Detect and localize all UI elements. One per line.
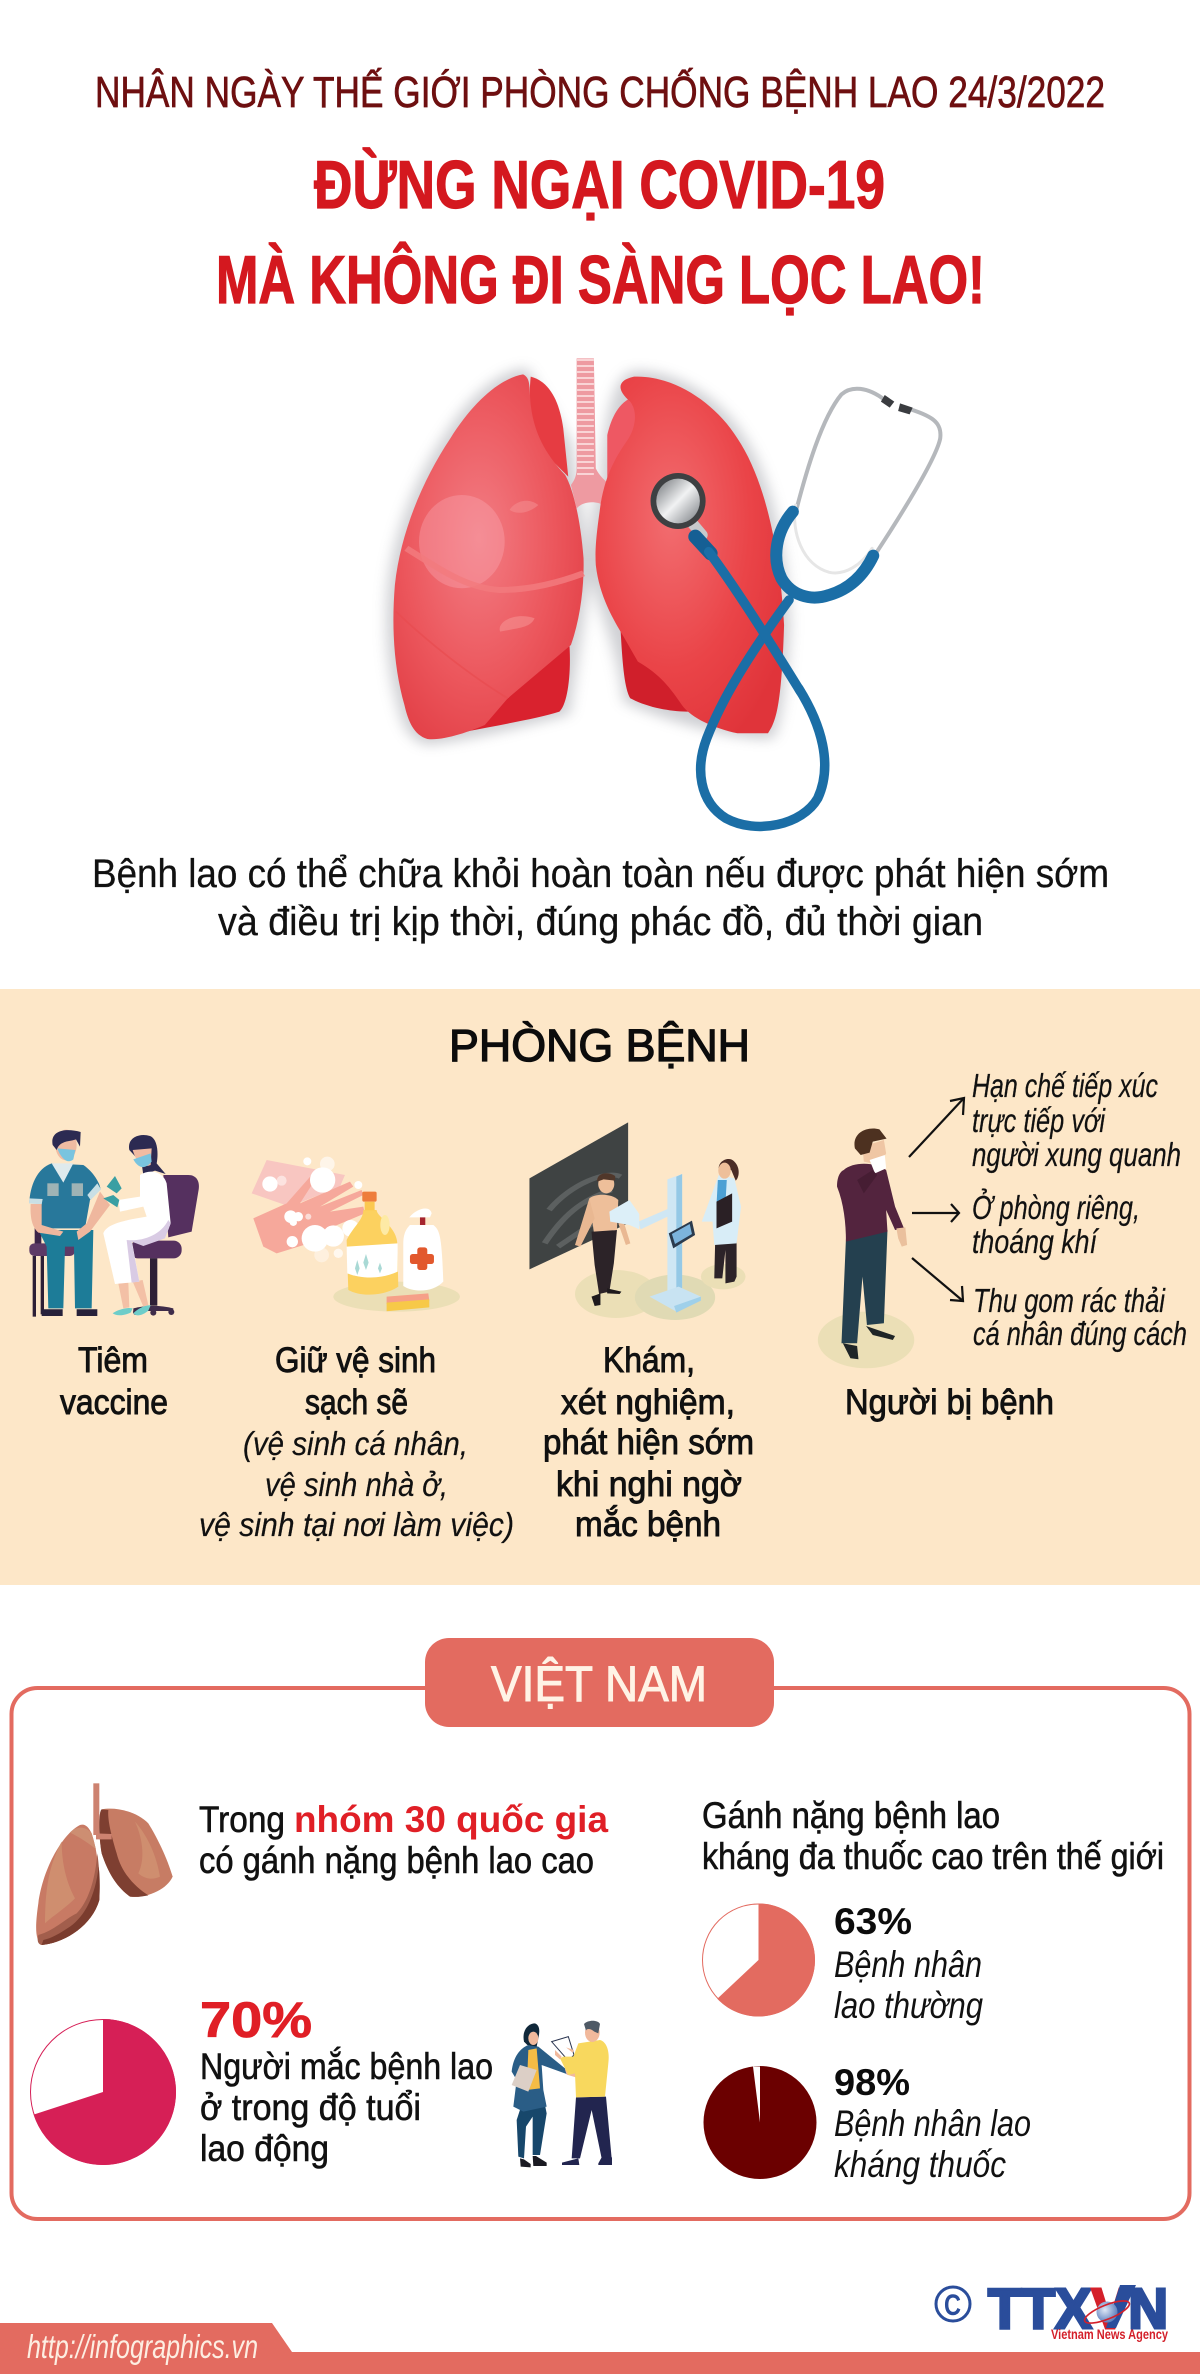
text: limit contact: trực tiếp với <box>972 1102 1106 1139</box>
stat: 70 percent working age: Người mắc bệnh lao <box>200 2046 493 2087</box>
label: examination: Khám, <box>603 1341 695 1380</box>
logo: TTXVN: Vietnam News Agency <box>1051 2327 1168 2342</box>
chart: 70 percent pie <box>30 2019 176 2165</box>
stat: 98 percent resistant patients <box>834 2062 1031 2185</box>
label: hygiene: vệ sinh tại nơi làm việc) <box>199 1506 514 1543</box>
label: hygiene <box>199 1341 514 1543</box>
text: group of 30 countries: nhóm 30 quốc gia <box>294 1799 608 1840</box>
icon: two people talking <box>512 2021 612 2167</box>
icon: hand washing and hygiene products <box>252 1157 460 1312</box>
chart: 98 percent pie <box>704 2066 816 2179</box>
heading: prevention: PHÒNG BỆNH <box>449 1020 750 1071</box>
stat: 63 percent ordinary patients: 63% <box>834 1901 912 1942</box>
text: private room: Ở phòng riêng, <box>972 1188 1140 1226</box>
heading pill: Vietnam <box>425 1638 774 1727</box>
label: examination: phát hiện sớm <box>543 1423 754 1462</box>
text: drug-resistant burden heading: Gánh nặng bệnh lao <box>702 1795 1000 1836</box>
panel: prevention <box>0 989 1200 1585</box>
label: hygiene: sạch sẽ <box>305 1383 408 1422</box>
logo: TTXVN: C <box>944 2289 961 2322</box>
intro text <box>92 852 1109 944</box>
stat: 63 percent ordinary patients <box>834 1901 983 2026</box>
right lung <box>621 632 690 712</box>
text: private room <box>972 1188 1140 1260</box>
stat: 70 percent working age: lao động <box>200 2128 329 2169</box>
label: hygiene: Giữ vệ sinh <box>275 1341 436 1380</box>
stat: 63 percent ordinary patients: lao thường <box>834 1985 983 2026</box>
chart: 63 percent pie <box>702 1904 815 2017</box>
stat: 98 percent resistant patients: Bệnh nhân lao <box>834 2103 1031 2144</box>
text: group of 30 countries <box>199 1799 608 1881</box>
stethoscope <box>651 389 940 826</box>
trachea <box>571 358 609 508</box>
icon: chest x-ray examination <box>529 1122 746 1320</box>
icon: vaccination <box>29 1130 199 1317</box>
label: vaccination: vaccine <box>60 1383 168 1422</box>
intro text: Bệnh lao có thể chữa khỏi hoàn toàn nếu được phát hiện sớm <box>92 852 1109 896</box>
panel: Vietnam <box>12 1638 1190 2219</box>
label: examination <box>543 1341 754 1544</box>
label: examination: mắc bệnh <box>575 1505 721 1544</box>
label: hygiene: (vệ sinh cá nhân, <box>243 1425 468 1462</box>
intro text: và điều trị kịp thời, đúng phác đồ, đủ thời gian <box>218 900 983 944</box>
label: sick person: Người bị bệnh <box>845 1383 1054 1422</box>
title: main headline: ĐỪNG NGẠI COVID-19 <box>314 147 885 223</box>
title: main headline <box>216 147 985 318</box>
text: drug-resistant burden heading <box>702 1795 1164 1877</box>
text: group of 30 countries: có gánh nặng bệnh lao cao <box>199 1840 594 1881</box>
stat: 98 percent resistant patients: 98% <box>834 2062 910 2103</box>
stat: 98 percent resistant patients: kháng thuốc <box>834 2144 1006 2185</box>
footer band with URL <box>0 2323 1200 2374</box>
arrow: private room <box>912 1204 959 1222</box>
logo: TTXVN: TTXVN <box>988 2277 1168 2341</box>
text: private room: thoáng khí <box>972 1223 1099 1260</box>
arrow: waste collection <box>912 1258 963 1301</box>
illustration: lungs with stethoscope <box>393 358 940 826</box>
label: vaccination: Tiêm <box>78 1341 148 1380</box>
label: vaccination <box>60 1341 168 1422</box>
text: group of 30 countries: Trong <box>199 1799 285 1840</box>
label: examination: xét nghiệm, <box>561 1383 735 1422</box>
stat: 70 percent working age <box>200 1992 493 2169</box>
arrow: limit contact <box>909 1098 964 1157</box>
stat: 63 percent ordinary patients: Bệnh nhân <box>834 1944 982 1985</box>
stat: 70 percent working age: ở trong độ tuổi <box>200 2087 421 2128</box>
icon: sick person coughing <box>818 1129 914 1368</box>
left lung <box>466 638 570 732</box>
text: limit contact <box>972 1067 1181 1173</box>
text: waste collection <box>973 1282 1187 1352</box>
label: examination: khi nghi ngờ <box>556 1465 742 1504</box>
footer band with URL: http://infographics.vn <box>27 2328 258 2365</box>
icon: brown lungs <box>36 1783 173 1945</box>
label: hygiene: vệ sinh nhà ở, <box>265 1466 448 1503</box>
heading pill: Vietnam: VIỆT NAM <box>491 1656 707 1712</box>
stat: 70 percent working age: 70% <box>200 1992 312 2048</box>
